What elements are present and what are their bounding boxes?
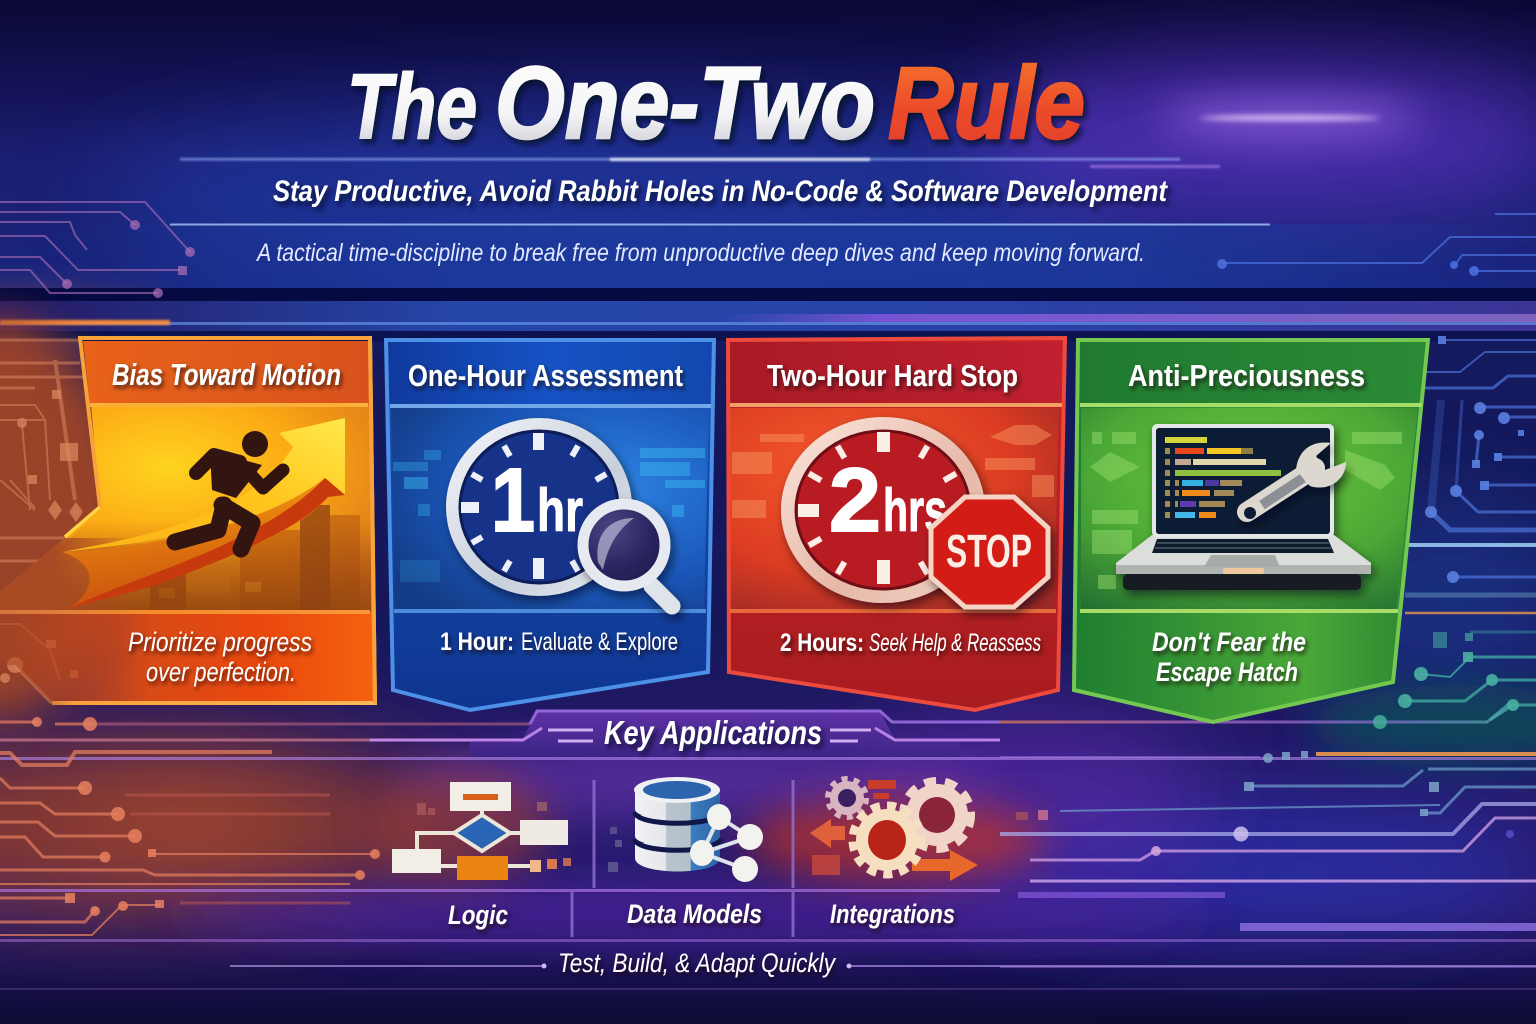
card caption xyxy=(440,628,678,656)
card caption: over perfection. xyxy=(146,657,296,687)
circuit traces lower right xyxy=(1000,703,1536,967)
card caption xyxy=(780,629,1041,657)
tagline: A tactical time-discipline to break free from unproductive deep dives and keep moving forward. xyxy=(255,239,1145,267)
icon: stop sign: STOP xyxy=(946,525,1032,577)
card base xyxy=(386,340,714,710)
card title: Bias Toward Motion xyxy=(112,357,341,392)
icon: laptop with code xyxy=(1116,424,1371,590)
section heading: Key Applications xyxy=(604,714,822,751)
title: The xyxy=(347,56,477,158)
card caption: Seek Help & Reassess xyxy=(869,629,1041,657)
icon: clock with 2hrs: hrs xyxy=(883,477,947,544)
title: Rule xyxy=(888,46,1085,160)
circuit traces left xyxy=(0,340,118,703)
frame xyxy=(0,338,375,703)
circuit traces header xyxy=(0,202,1536,298)
circuit traces lower left xyxy=(0,717,530,935)
card header xyxy=(83,341,369,406)
panel: two-hour hard stop xyxy=(728,338,1065,710)
yellow rising arrow xyxy=(62,418,345,552)
label: logic: Logic xyxy=(448,900,508,930)
icon: flowchart xyxy=(392,782,571,880)
icon: clock with 2hrs xyxy=(781,417,985,603)
icon: clock with 1hr: hr xyxy=(537,477,583,544)
footer tagline xyxy=(230,948,1536,978)
bar backdrop xyxy=(150,505,360,610)
title xyxy=(347,46,1085,160)
title: One-Two xyxy=(495,46,875,160)
label: integrations: Integrations xyxy=(830,899,955,929)
card caption: Prioritize progress xyxy=(128,627,312,657)
card base xyxy=(1074,340,1428,722)
key applications banner xyxy=(370,711,1000,757)
orange swoosh xyxy=(62,478,345,608)
frame xyxy=(1074,340,1428,722)
card caption: Don't Fear the xyxy=(1152,627,1306,657)
circuit traces right xyxy=(1398,336,1536,720)
icon: stop sign xyxy=(931,497,1048,607)
icon: wrench xyxy=(1244,442,1346,519)
card lower band xyxy=(0,612,375,703)
card caption: Evaluate & Explore xyxy=(521,628,678,656)
subtitle: Stay Productive, Avoid Rabbit Holes in No-Code & Software Development xyxy=(273,175,1169,208)
panel: one-hour assessment xyxy=(386,340,714,710)
card caption: 2 Hours: xyxy=(780,629,864,657)
green backdrop xyxy=(1090,432,1402,589)
clock numeral: 1 xyxy=(491,451,535,551)
icon: database with nodes xyxy=(608,777,763,882)
icon: clock with 1hr xyxy=(446,418,632,596)
icon: runner xyxy=(175,431,283,549)
card caption xyxy=(1152,627,1306,687)
icon: magnifier xyxy=(583,504,672,606)
flow backdrop xyxy=(732,425,1054,518)
frame xyxy=(386,340,714,710)
footer tagline: Test, Build, & Adapt Quickly xyxy=(558,948,836,978)
card title: Anti-Preciousness xyxy=(1128,358,1365,393)
icon: gears and arrows xyxy=(810,779,978,881)
panel: anti-preciousness xyxy=(1074,340,1428,722)
card title: One-Hour Assessment xyxy=(408,358,683,393)
red lower arrow xyxy=(70,478,345,608)
card base xyxy=(728,338,1065,710)
card caption: Escape Hatch xyxy=(1156,657,1298,687)
column separators xyxy=(572,780,793,937)
card caption: 1 Hour: xyxy=(440,628,514,656)
frame xyxy=(728,338,1065,710)
card caption xyxy=(128,627,312,687)
label: data models: Data Models xyxy=(627,899,762,929)
card title: Two-Hour Hard Stop xyxy=(767,358,1018,393)
panel: bias toward motion xyxy=(0,338,375,703)
data backdrop xyxy=(393,448,705,582)
card picture xyxy=(0,405,372,612)
clock numeral: 2 xyxy=(829,451,881,551)
